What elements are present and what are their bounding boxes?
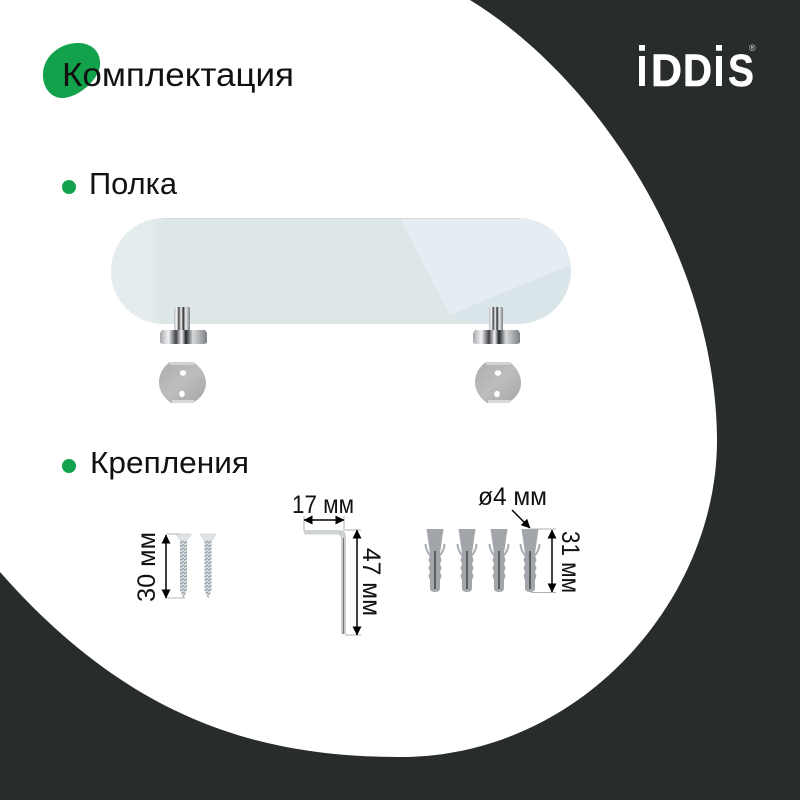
logo: iDDiS — [636, 35, 756, 99]
screws with 30 mm dimension — [133, 532, 216, 602]
screws with 30 mm dimension: 30 мм — [133, 532, 161, 602]
left mounting plate — [159, 362, 206, 403]
section: fasteners label: Крепления — [90, 445, 249, 480]
logo: iDDiS: ® — [749, 43, 756, 53]
wall plug 1 — [426, 529, 444, 592]
wall plugs with dimensions — [426, 483, 584, 593]
logo: iDDiS: D — [683, 45, 712, 96]
section: shelf label: Полка — [89, 166, 178, 201]
wall plugs with dimensions: 31 мм — [556, 531, 584, 593]
right chrome holder — [473, 307, 520, 344]
hex key with 17 and 47 mm dimensions: 47 мм — [357, 548, 385, 616]
right mounting plate — [475, 362, 521, 403]
wall plugs with dimensions: ø4 мм — [478, 483, 547, 511]
shelf glass panel — [111, 218, 571, 324]
logo: iDDiS: S — [728, 45, 754, 96]
logo: iDDiS: D — [651, 45, 682, 96]
icon: green blob behind title — [43, 43, 100, 98]
title: Комплектация — [62, 56, 294, 93]
wall plug 3 — [490, 529, 508, 592]
wall plug 2 — [458, 529, 476, 592]
logo: iDDiS: i — [713, 35, 725, 99]
hex key with 17 and 47 mm dimensions: 17 мм — [292, 491, 354, 519]
left chrome holder — [160, 307, 207, 344]
hex key with 17 and 47 mm dimensions — [292, 491, 385, 635]
wall plug 4 — [520, 529, 540, 592]
logo: iDDiS: i — [636, 35, 648, 99]
